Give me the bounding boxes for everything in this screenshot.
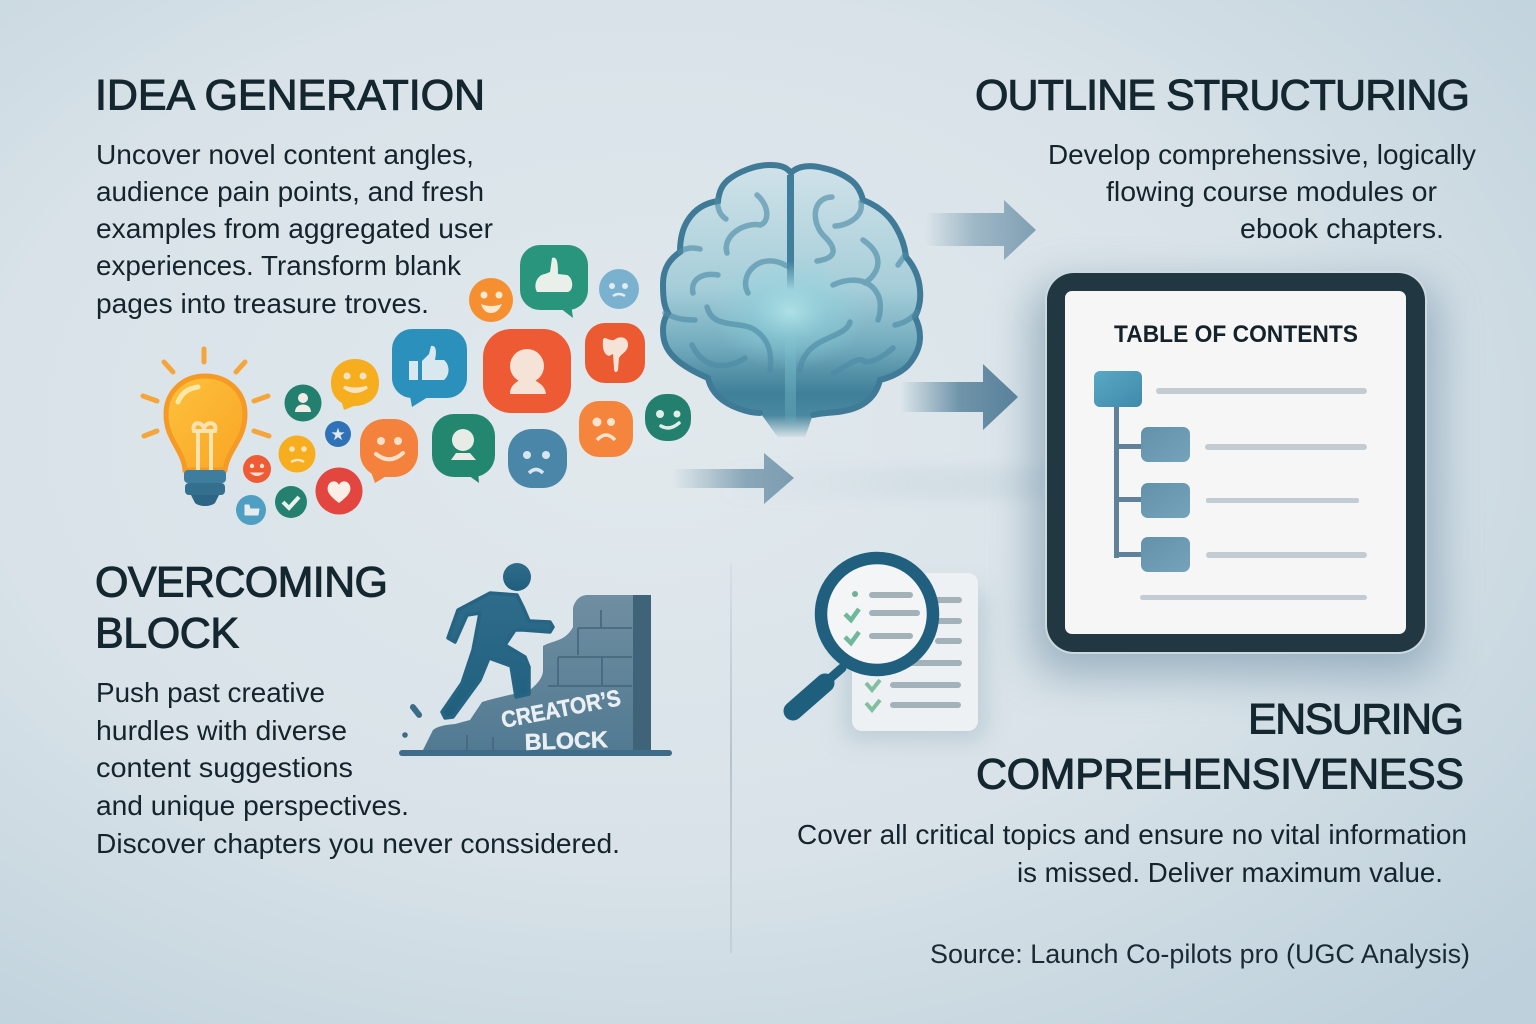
- source note: Source: Launch Co-pilots pro (UGC Analysis): [930, 939, 1470, 969]
- checklist lines: [890, 597, 962, 708]
- icon: orange sad face: [579, 401, 633, 457]
- icon: blue star badge: [325, 421, 351, 447]
- heading: ensuring comprehensiveness: ENSURING: [1248, 696, 1464, 744]
- text block: outline structuring description: [1048, 139, 1476, 244]
- brain folds: [665, 195, 917, 373]
- wall label: [499, 684, 623, 755]
- wall label: CREATOR’S: [499, 684, 623, 733]
- heading: overcoming block: BLOCK: [95, 610, 239, 658]
- debris: [402, 703, 423, 738]
- brain midline: [787, 175, 794, 290]
- chapter box: top level: [1094, 371, 1142, 407]
- text block: outline structuring description: ebook chapters.: [1240, 213, 1444, 244]
- brain stem line: [785, 335, 796, 423]
- text block: overcoming block description: and unique perspectives.: [96, 790, 409, 821]
- arrow: brain to outline top: [925, 200, 1036, 260]
- icon: blue star badge: ★: [330, 425, 346, 444]
- icon: red thumbs down bubble: [585, 323, 645, 383]
- icon: green profile badge: [284, 384, 322, 422]
- brain outline: [663, 165, 920, 415]
- text block: ensuring comprehensiveness description: is missed. Deliver maximum value.: [1017, 857, 1443, 888]
- magnifier handle: [793, 668, 842, 711]
- chapter boxes: sub levels: [1141, 427, 1190, 572]
- icon: orange smile face: [469, 278, 513, 322]
- icon: green profile bubble: [432, 414, 495, 483]
- brain glow: [712, 254, 868, 370]
- lens checklist: [845, 591, 920, 643]
- icon group: social reactions and emoji: [236, 245, 691, 525]
- text block: overcoming block description: [96, 677, 620, 859]
- text block: idea generation description: experiences. Transform blank: [96, 250, 462, 281]
- text block: overcoming block description: hurdles with diverse: [96, 715, 347, 746]
- text block: outline structuring description: flowing course modules or: [1106, 176, 1437, 207]
- arrow: ideas to outline lower: [672, 453, 794, 504]
- wall label: BLOCK: [524, 726, 609, 755]
- wall: [423, 595, 650, 753]
- heading: overcoming block: [95, 558, 388, 658]
- icon: light blue sad face: [599, 269, 639, 309]
- icon: brain: [663, 165, 920, 437]
- lower checks: [866, 680, 880, 710]
- icon: light bulb: [143, 349, 269, 506]
- icon: steel blue sad face: [508, 429, 567, 488]
- ground: [399, 750, 672, 756]
- icon: green check badge: [275, 486, 307, 518]
- tablet title: TABLE OF CONTENTS: [1114, 321, 1358, 348]
- shadow behind tablet: [1032, 285, 1437, 675]
- text block: idea generation description: pages into treasure troves.: [96, 288, 429, 319]
- arrow: brain to outline middle: [900, 364, 1018, 430]
- heading: outline structuring: OUTLINE STRUCTURING: [975, 72, 1470, 120]
- icon: small red smile: [243, 455, 271, 483]
- heading: idea generation: IDEA GENERATION: [95, 72, 485, 120]
- shadow behind magnifier: [845, 590, 985, 740]
- heading: overcoming block: OVERCOMING: [95, 558, 388, 606]
- icon: magnifying glass over checklist: [793, 558, 978, 731]
- icon: red heart badge: [316, 468, 362, 514]
- checklist paper: [852, 573, 978, 731]
- text block: idea generation description: [96, 139, 493, 319]
- text block: ensuring comprehensiveness description: Cover all critical topics and ensure no vital information: [797, 819, 1467, 850]
- divider: [730, 563, 732, 953]
- magnifier lens: [821, 558, 933, 670]
- icon: orange smile bubble: [360, 419, 418, 483]
- heading: ensuring comprehensiveness: [976, 696, 1464, 798]
- text block: idea generation description: examples from aggregated user: [96, 213, 493, 244]
- icon: yellow smile bubble: [331, 359, 379, 410]
- outline tree connectors: [1114, 405, 1144, 558]
- text block: overcoming block description: content suggestions: [96, 752, 353, 783]
- panel: tablet table of contents: [1045, 271, 1427, 654]
- icon: person climbing creator's block wall: [399, 563, 672, 756]
- text block: overcoming block description: Push past creative: [96, 677, 325, 708]
- climbing figure: [442, 563, 553, 718]
- icon: light blue thumb badge: [236, 495, 266, 525]
- text block: outline structuring description: Develop comprehenssive, logically: [1048, 139, 1476, 170]
- heading: ensuring comprehensiveness: COMPREHENSIVENESS: [976, 750, 1464, 798]
- decorative soft band behind arrows: [720, 466, 1050, 500]
- text block: ensuring comprehensiveness description: [797, 819, 1467, 888]
- text block: idea generation description: Uncover novel content angles,: [96, 139, 474, 170]
- icon: red profile bubble: [483, 329, 571, 413]
- icon: blue thumbs up bubble: [392, 329, 467, 407]
- icon: green thumbs up bubble: [520, 245, 588, 318]
- chapter placeholder lines: [1140, 388, 1367, 600]
- text block: overcoming block description: Discover chapters you never conssidered.: [96, 828, 620, 859]
- icon: yellow worried face: [278, 436, 316, 472]
- bricks: [467, 610, 632, 752]
- icon: dark green smile: [645, 394, 691, 441]
- text block: idea generation description: audience pain points, and fresh: [96, 176, 484, 207]
